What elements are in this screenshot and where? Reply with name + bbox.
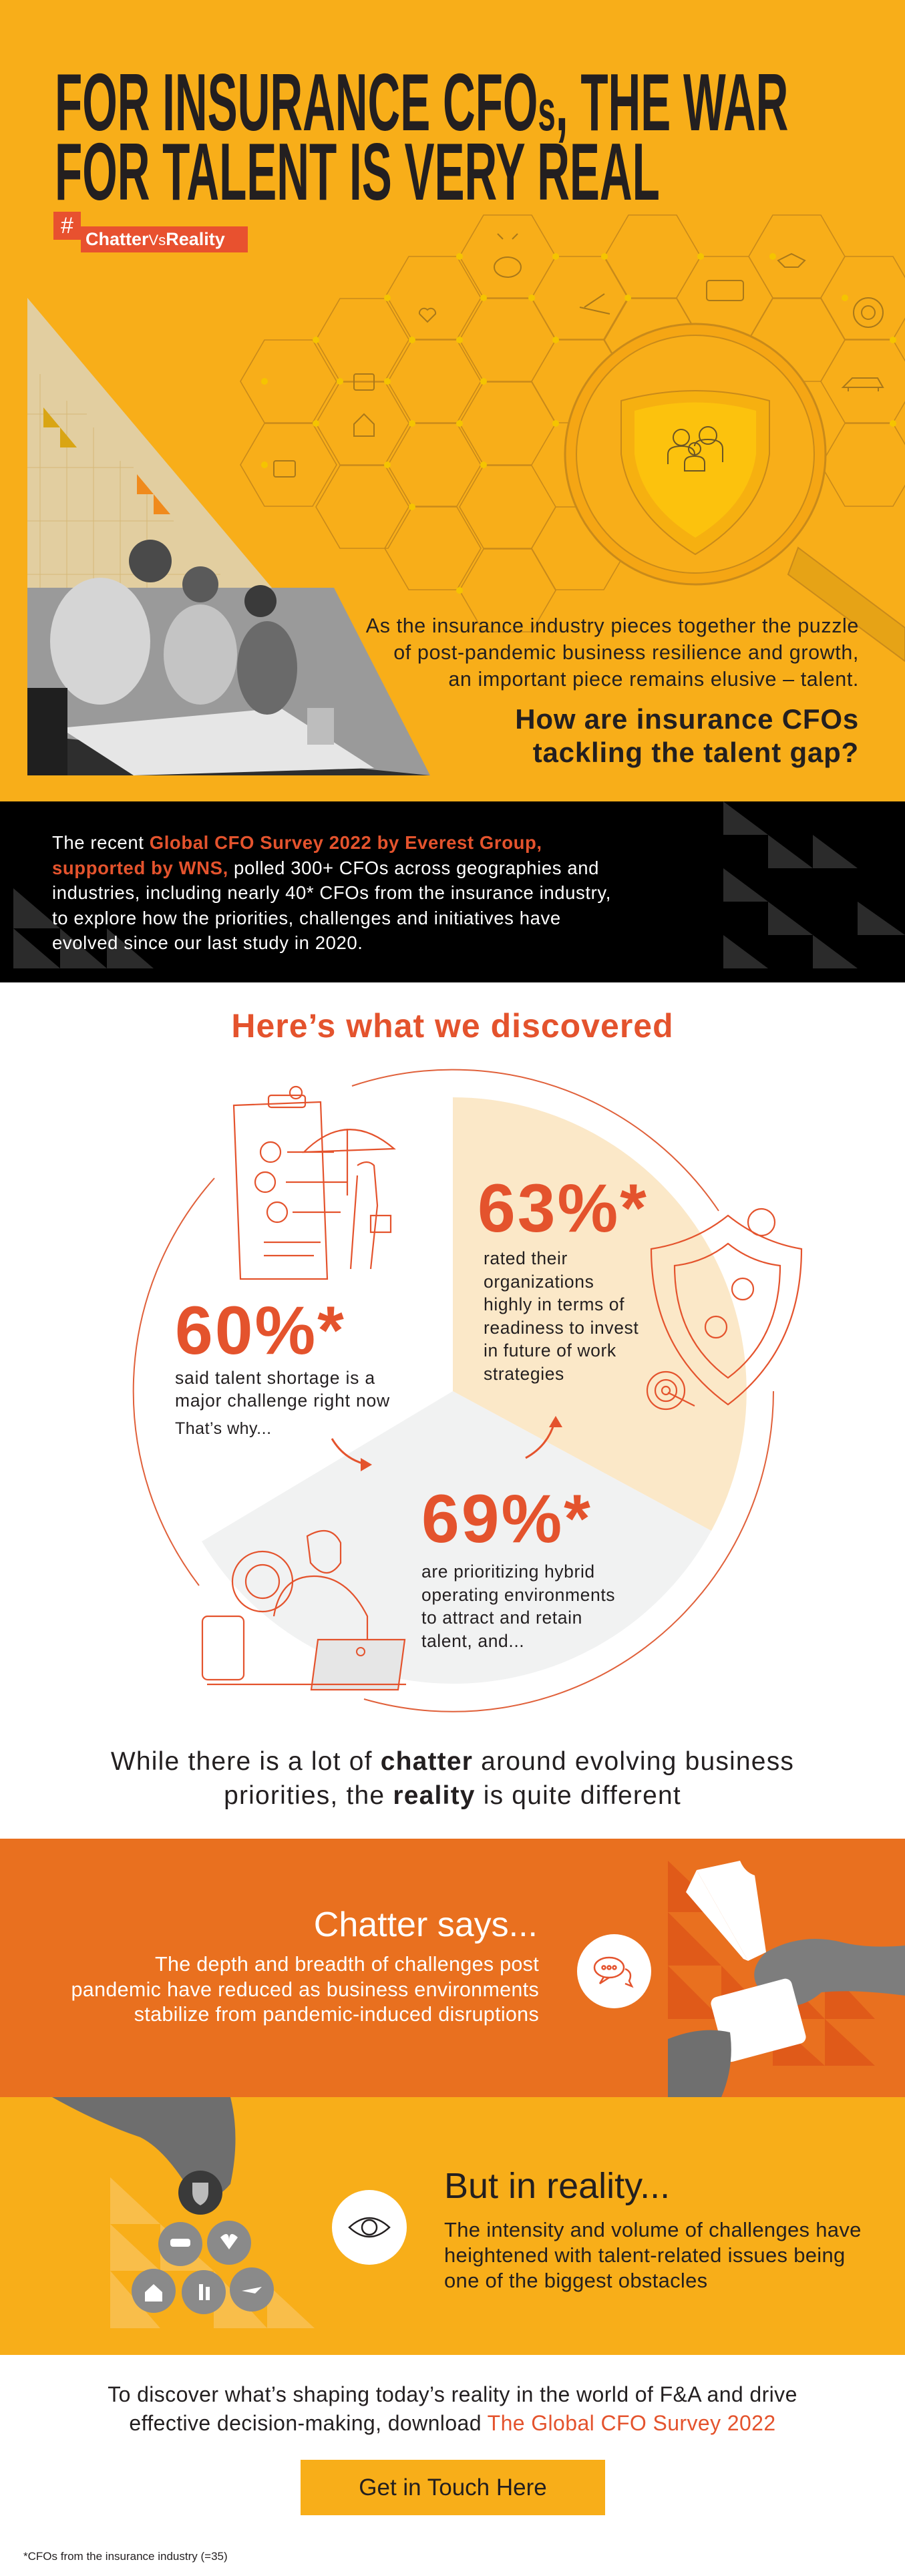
- body: one of the biggest obstacles: [444, 2269, 707, 2292]
- footnote: *CFOs from the insurance industry (=35): [23, 2550, 228, 2563]
- stat: 69%: [421, 1481, 615, 1651]
- stat: 63%: highly in terms of: [484, 1294, 624, 1314]
- hashtag badge: ChatterVsReality: [85, 229, 225, 249]
- body: [71, 1953, 539, 2026]
- title: [55, 57, 788, 217]
- stat: 60%: That’s why...: [175, 1419, 272, 1438]
- intro text: [366, 614, 859, 691]
- body: pandemic have reduced as business environments: [71, 1978, 539, 2001]
- photo: team at table: [27, 540, 430, 775]
- body: stabilize from pandemic-induced disruptions: [134, 2003, 539, 2026]
- panel: chatter says: [0, 1839, 905, 2097]
- stat: 63%: 63%*: [478, 1170, 649, 1246]
- survey description: [52, 832, 611, 953]
- reality image: hand with coins: [52, 2097, 315, 2328]
- beige wedge: [453, 1097, 747, 1531]
- magnifying glass with family shield: [565, 324, 905, 661]
- icon: man with laptop and gear: [202, 1531, 406, 1690]
- title: FOR TALENT IS VERY REAL: [55, 126, 660, 217]
- black band: [0, 801, 905, 982]
- stat: 63%: [478, 1170, 649, 1384]
- gray wedge: [202, 1391, 711, 1684]
- icon: speech bubbles: [577, 1934, 651, 2008]
- stat: 60%: major challenge right now: [175, 1391, 390, 1411]
- footer call to action text: To discover what’s shaping today’s reality in the world of F&A and drive: [108, 2382, 797, 2406]
- transition statement: priorities, the reality is quite different: [224, 1781, 681, 1810]
- stat: 60%: 60%*: [175, 1292, 346, 1368]
- header background: yellow: [0, 0, 905, 801]
- footer call to action text: effective decision-making, download The Global CFO Survey 2022: [129, 2411, 776, 2435]
- icon: eye: [332, 2190, 407, 2265]
- stat: 69%: to attract and retain: [421, 1608, 582, 1628]
- arrows: [332, 1423, 554, 1465]
- stat: 63%: in future of work: [484, 1340, 616, 1360]
- body: The intensity and volume of challenges have: [444, 2218, 862, 2241]
- body: heightened with talent-related issues being: [444, 2243, 846, 2267]
- hashtag badge: [53, 212, 248, 252]
- icon: shield with people: [647, 1209, 801, 1409]
- button: get in touch: Get in Touch Here: [359, 2474, 547, 2501]
- body: The depth and breadth of challenges post: [155, 1953, 539, 1976]
- hashtag badge: #: [61, 213, 73, 238]
- body: [444, 2218, 862, 2292]
- icon: clipboard with umbrella man: [234, 1087, 394, 1279]
- stats circle graphic: [132, 1069, 803, 1712]
- chatter image: hands with shield and briefcase: [668, 1861, 905, 2097]
- stat: 63%: organizations: [484, 1272, 594, 1292]
- question heading: tackling the talent gap?: [533, 737, 859, 768]
- beige triangle backdrop: [27, 298, 430, 775]
- intro text: an important piece remains elusive – talent.: [448, 668, 859, 691]
- heading: Chatter says...: [314, 1905, 538, 1944]
- survey description: supported by WNS, polled 300+ CFOs across geographies and: [52, 858, 599, 878]
- title: FOR INSURANCE CFOs, THE WAR: [55, 57, 788, 148]
- stat: 69%: operating environments: [421, 1584, 615, 1604]
- survey description: The recent Global CFO Survey 2022 by Everest Group,: [52, 832, 542, 853]
- heading: discovered: Here’s what we discovered: [231, 1007, 674, 1045]
- question heading: [515, 703, 859, 768]
- stat: 60%: said talent shortage is a: [175, 1368, 375, 1388]
- stat: 60%: [175, 1292, 390, 1438]
- question heading: How are insurance CFOs: [515, 703, 859, 735]
- survey description: industries, including nearly 40* CFOs from the insurance industry,: [52, 882, 611, 903]
- stat: 69%: are prioritizing hybrid: [421, 1561, 595, 1582]
- footer call to action text: [108, 2382, 797, 2435]
- stat: 69%: 69%*: [421, 1481, 592, 1557]
- stat: 69%: talent, and...: [421, 1631, 524, 1651]
- intro text: of post-pandemic business resilience and growth,: [393, 641, 859, 664]
- header illustration: [27, 214, 905, 775]
- hexagon network: [240, 215, 905, 632]
- stat: 63%: readiness to invest: [484, 1317, 639, 1337]
- heading: But in reality...: [444, 2166, 670, 2206]
- panel: but in reality: [0, 2097, 905, 2355]
- transition statement: While there is a lot of chatter around evolving business: [111, 1747, 794, 1776]
- survey description: to explore how the priorities, challenges and initiatives have: [52, 907, 561, 928]
- stat: 63%: rated their: [484, 1248, 568, 1268]
- transition statement: [111, 1747, 794, 1810]
- stat: 63%: strategies: [484, 1364, 564, 1384]
- intro text: As the insurance industry pieces together the puzzle: [366, 614, 859, 637]
- survey description: evolved since our last study in 2020.: [52, 932, 363, 953]
- button: get in touch: [301, 2460, 605, 2515]
- outer arcs: [134, 1070, 773, 1712]
